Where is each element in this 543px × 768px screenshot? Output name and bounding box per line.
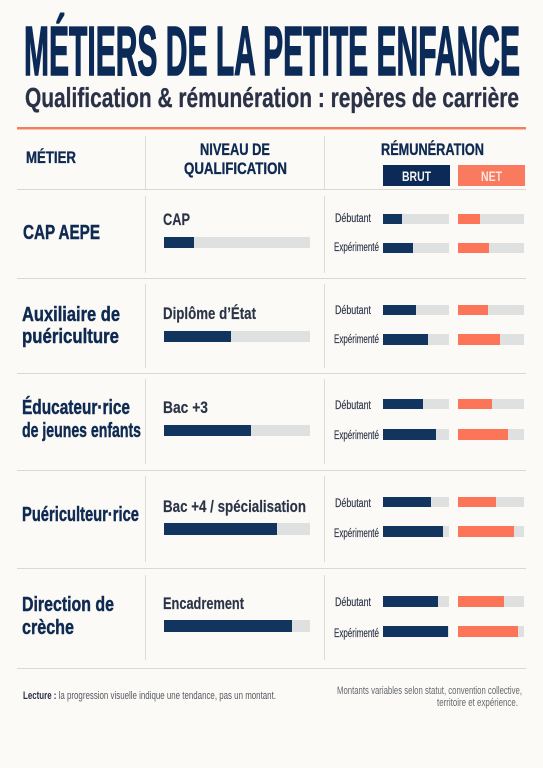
job title: Direction de — [22, 594, 114, 616]
qualification bar — [164, 620, 310, 632]
pay bars: débutant: Débutant — [335, 305, 372, 317]
qualification bar — [164, 425, 310, 436]
column heading: niveau de qualification: QUALIFICATION — [184, 159, 287, 178]
job title: puériculture — [22, 326, 119, 348]
pay bars: débutant — [335, 305, 524, 317]
footnote: montants — [337, 685, 522, 709]
qualification label: CAP — [163, 211, 190, 229]
qualification label: Bac +3 — [163, 399, 208, 417]
pay bars: expérimenté: Expérimenté — [334, 628, 379, 640]
row: CAP AEPE — [23, 211, 524, 254]
pay bars: expérimenté — [334, 429, 524, 442]
legend: brut — [383, 165, 450, 186]
row: Auxiliaire de puériculture — [22, 304, 524, 348]
pay bars: expérimenté — [334, 334, 524, 346]
qualification bar — [164, 237, 310, 248]
pay bars: débutant — [335, 213, 524, 225]
pay bars: débutant: Débutant — [335, 498, 372, 510]
row: Direction de crèche — [22, 594, 524, 640]
row: Puériculteur·rice — [22, 497, 524, 540]
job title — [22, 594, 114, 639]
job title — [22, 396, 141, 442]
job title: crèche — [22, 617, 74, 639]
qualification label: Bac +4 / spécialisation — [163, 498, 306, 516]
pay bars: expérimenté: Expérimenté — [334, 528, 379, 540]
qualification label: Diplôme d’État — [163, 304, 256, 323]
pay bars: expérimenté — [334, 626, 524, 640]
pay bars: expérimenté: Expérimenté — [334, 242, 379, 254]
pay bars: expérimenté: Expérimenté — [334, 334, 379, 346]
pay bars: débutant — [335, 596, 524, 609]
legend: brut: BRUT — [402, 168, 431, 184]
qualification bar — [164, 523, 310, 535]
qualification bar — [164, 331, 310, 342]
legend: net: NET — [481, 168, 502, 184]
pay bars: expérimenté — [334, 526, 524, 540]
column heading: métier: MÉTIER — [26, 148, 76, 167]
pay bars: débutant: Débutant — [335, 400, 372, 412]
job title — [22, 304, 120, 348]
legend: net — [458, 165, 525, 186]
pay bars: débutant: Débutant — [335, 597, 372, 609]
job title: Puériculteur·rice — [22, 504, 139, 526]
pay bars: débutant — [335, 399, 524, 412]
footnote: lecture: Lecture : la progression visuelle indique une tendance, pas un montant. — [23, 690, 276, 702]
column heading: rémunération: RÉMUNÉRATION — [381, 140, 484, 159]
pay bars: expérimenté: Expérimenté — [334, 430, 379, 442]
job title: CAP AEPE — [23, 222, 100, 244]
job title: Éducateur·rice — [22, 396, 130, 419]
job title: de jeunes enfants — [22, 420, 141, 442]
qualification label: Encadrement — [163, 595, 244, 613]
pay bars: débutant: Débutant — [335, 213, 372, 225]
row: Éducateur·rice de jeunes enfants — [22, 396, 524, 442]
pay bars: expérimenté — [334, 242, 524, 254]
column heading: niveau de qualification: NIVEAU DE — [200, 140, 270, 159]
column heading: niveau de qualification — [184, 140, 287, 178]
pay bars: débutant — [335, 497, 524, 510]
table header — [26, 140, 525, 186]
job title: Auxiliaire de — [22, 304, 120, 326]
